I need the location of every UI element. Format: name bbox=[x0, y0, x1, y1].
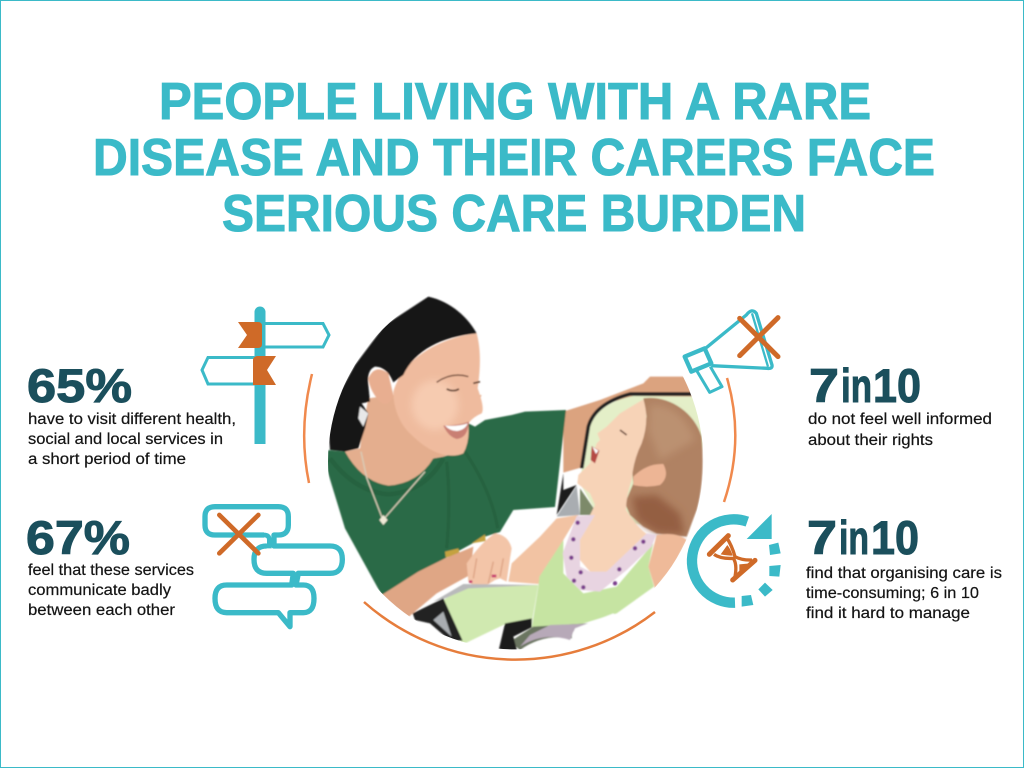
child's arm bbox=[508, 515, 578, 584]
title: SERIOUS CARE BURDEN bbox=[222, 185, 806, 243]
child's shoulder bbox=[648, 534, 687, 588]
child's lap bbox=[513, 622, 588, 650]
arm and stroller behind the child bbox=[557, 377, 707, 537]
stat: 7 in 10 not informed: in bbox=[841, 359, 872, 412]
stat: 65%: 65% bbox=[27, 359, 132, 412]
title: PEOPLE LIVING WITH A RARE bbox=[159, 73, 871, 131]
icon: hourglass bbox=[709, 536, 755, 580]
stat: 7 in 10 not informed: 7 bbox=[809, 359, 839, 412]
woman's forearm bbox=[382, 547, 473, 620]
woman's hair bbox=[328, 297, 477, 452]
stroller tray bbox=[413, 584, 538, 652]
woman's shirt bbox=[327, 410, 566, 595]
stat: 7 in 10 time-consuming: in bbox=[839, 511, 869, 564]
stat: 7 in 10 time-consuming: 10 bbox=[871, 511, 919, 564]
child's dress bbox=[532, 540, 654, 628]
orange arc: left bbox=[304, 374, 312, 483]
stat: 7 in 10 time-consuming: 7 bbox=[807, 511, 837, 564]
woman's smile and eyes bbox=[443, 422, 469, 439]
necklace bbox=[361, 452, 425, 518]
child's hand bbox=[467, 533, 512, 588]
stat: 65%: a short period of time bbox=[28, 451, 186, 468]
stat: 67%: feel that these services bbox=[28, 562, 194, 579]
stat: 7 in 10 time-consuming: find it hard to manage bbox=[806, 605, 970, 622]
icon: speech bubbles with cross bbox=[205, 507, 342, 627]
child's ear bbox=[633, 464, 666, 487]
child's face and neck bbox=[577, 399, 647, 573]
woman's neck bbox=[345, 395, 482, 486]
title: DISEASE AND THEIR CARERS FACE bbox=[93, 129, 935, 187]
stat: 7 in 10 not informed: do not feel well informed bbox=[808, 411, 992, 428]
woman's face bbox=[393, 333, 483, 456]
woman bbox=[327, 297, 566, 620]
orange arc: right bbox=[724, 378, 735, 502]
stat: 7 in 10 not informed: 10 bbox=[873, 359, 921, 412]
stat: 7 in 10 time-consuming: time-consuming; 6 in 10 bbox=[806, 585, 979, 602]
stat: 7 in 10 not informed bbox=[808, 359, 992, 449]
orange arc: bottom bbox=[364, 602, 655, 660]
stat: 67% bbox=[26, 511, 194, 619]
icon: signpost bbox=[202, 307, 329, 444]
stat: 7 in 10 time-consuming: find that organising care is bbox=[806, 565, 1002, 582]
stat: 65%: have to visit different health, bbox=[28, 411, 236, 428]
child's hair bbox=[625, 398, 703, 537]
title bbox=[93, 73, 935, 243]
photo: mother and daughter bbox=[327, 297, 707, 652]
stat: 67%: communicate badly bbox=[28, 582, 171, 599]
icon: megaphone with cross bbox=[685, 311, 778, 392]
stat: 7 in 10 not informed: about their rights bbox=[808, 432, 933, 449]
stat: 67%: between each other bbox=[28, 602, 175, 619]
child bbox=[508, 398, 703, 650]
stat: 65%: social and local services in bbox=[28, 431, 223, 448]
woman's ear bbox=[368, 369, 393, 404]
stat: 65% bbox=[27, 359, 236, 468]
stat: 67%: 67% bbox=[26, 511, 130, 564]
icon: circular arrow bbox=[692, 514, 781, 607]
stat: 7 in 10 time-consuming bbox=[806, 511, 1002, 622]
child's collar bbox=[563, 515, 656, 592]
